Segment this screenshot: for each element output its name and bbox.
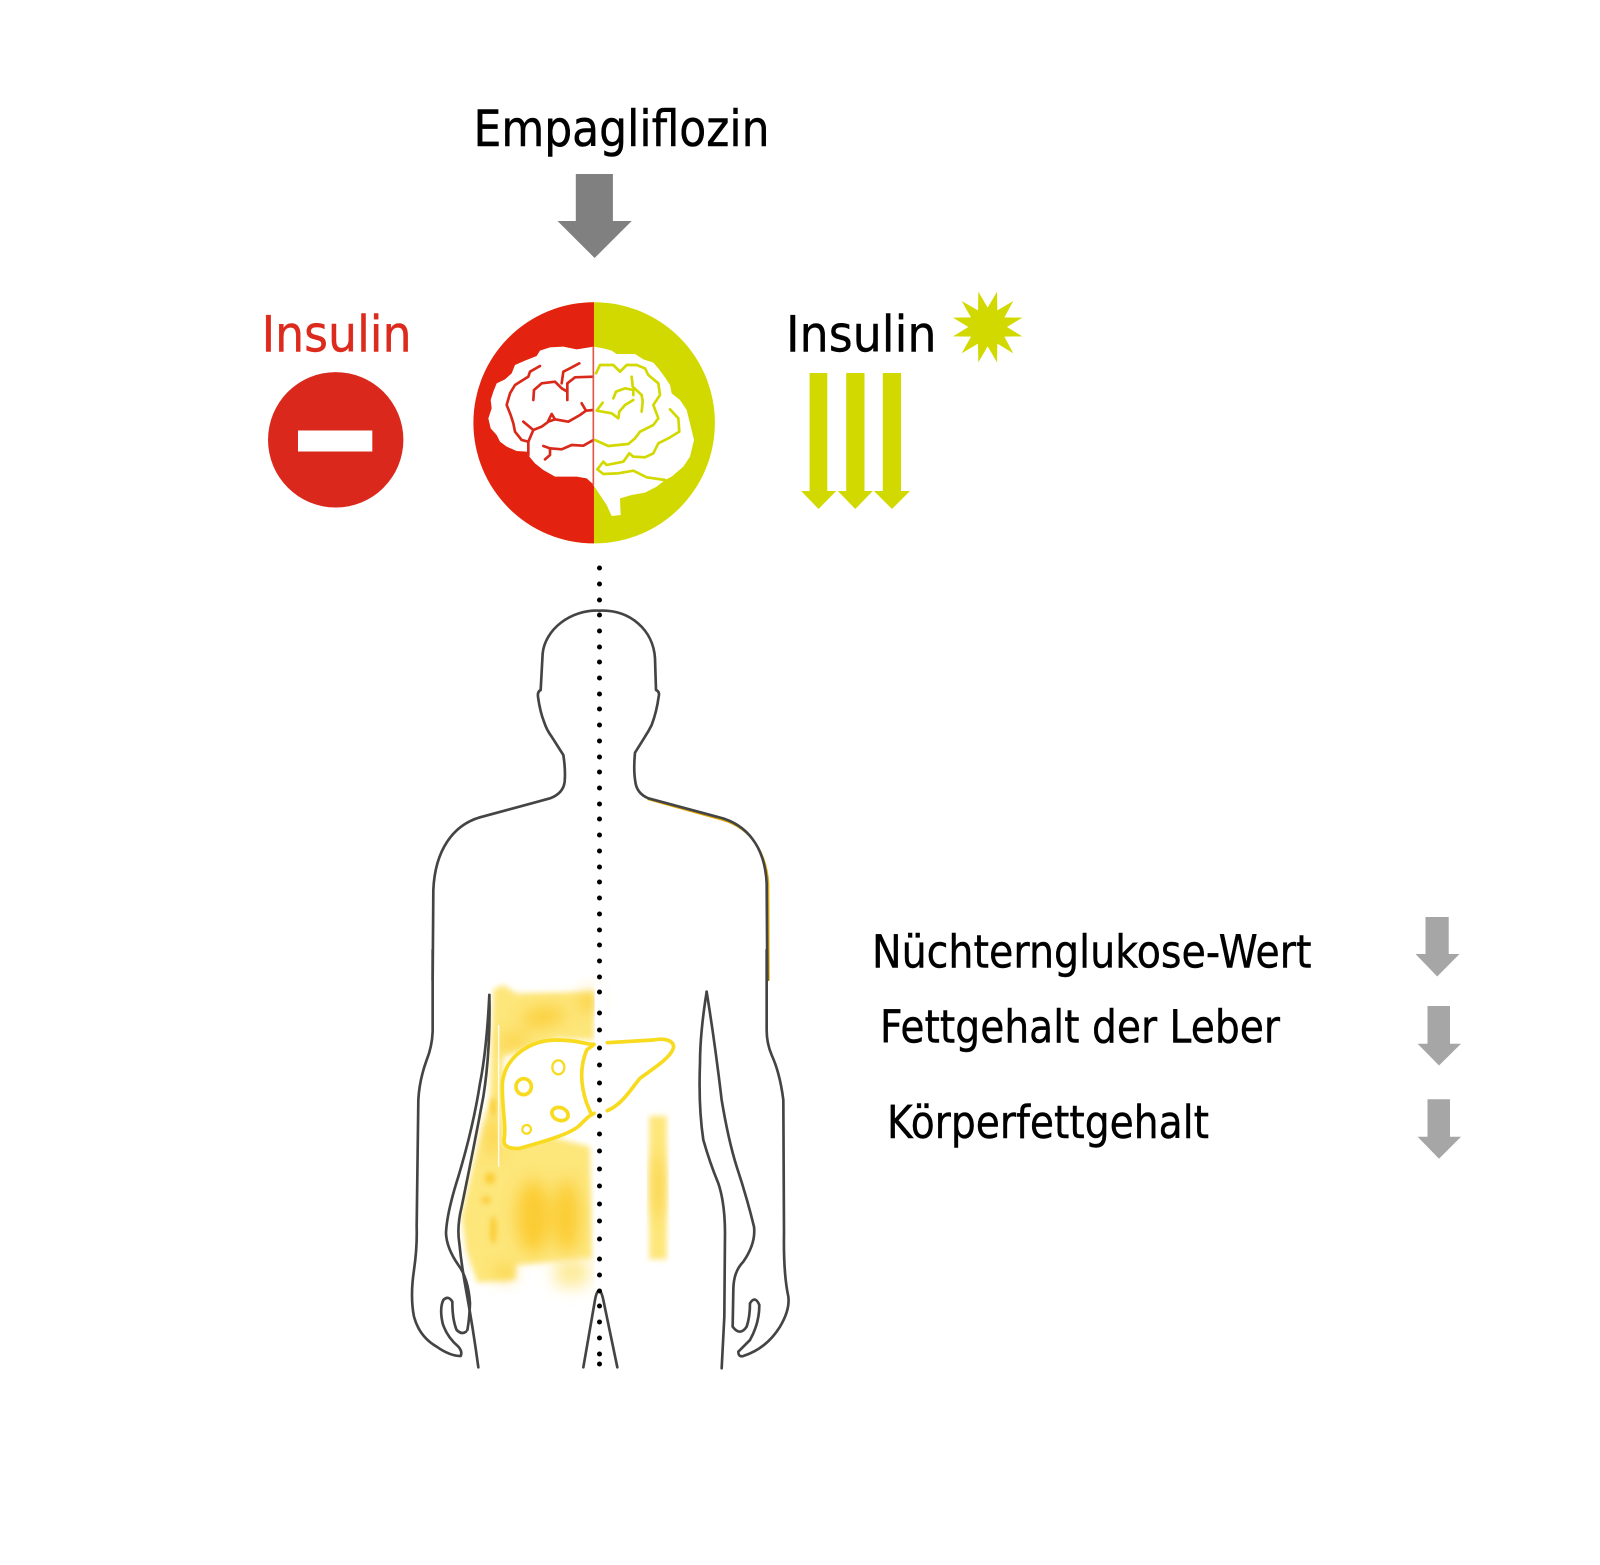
body fat: yellow fat deposits [462,983,667,1300]
label: Insulin red: Insulin [262,306,412,364]
brain right half [593,347,694,516]
brain left half [488,347,594,485]
dotted midline [597,566,602,1366]
icon: red minus sign [268,372,403,507]
arrow: Nüchternglukose down [1416,917,1460,976]
left inner arm [446,995,489,1330]
icon: yellow star burst [953,292,1022,362]
right torso [700,992,725,1368]
icon: three yellow down arrows [801,373,910,509]
label: Insulin black: Insulin [786,306,936,364]
arrow: Fettgehalt der Leber down [1418,1006,1461,1066]
body outline: head, neck and shoulders [433,611,769,980]
label: Nüchternglukose-Wert: Nüchternglukose-Wert [872,926,1312,979]
liver: yellow outline with fat droplets [502,1039,674,1148]
body outline: torso, arms and hands [412,950,789,1368]
arrow: grey down arrow from Empagliflozin to brain [558,174,632,258]
label: Fettgehalt der Leber: Fettgehalt der Leber [880,1001,1280,1054]
icon: brain in red and yellow circle [473,302,715,543]
crotch [583,1290,617,1367]
title: Empagliflozin: Empagliflozin [474,100,770,158]
left outer arm and hand [412,950,466,1356]
right inner arm and hand [707,950,789,1356]
arrow: Körperfettgehalt down [1418,1099,1461,1159]
left torso [458,995,490,1367]
label: Körperfettgehalt: Körperfettgehalt [887,1096,1209,1149]
